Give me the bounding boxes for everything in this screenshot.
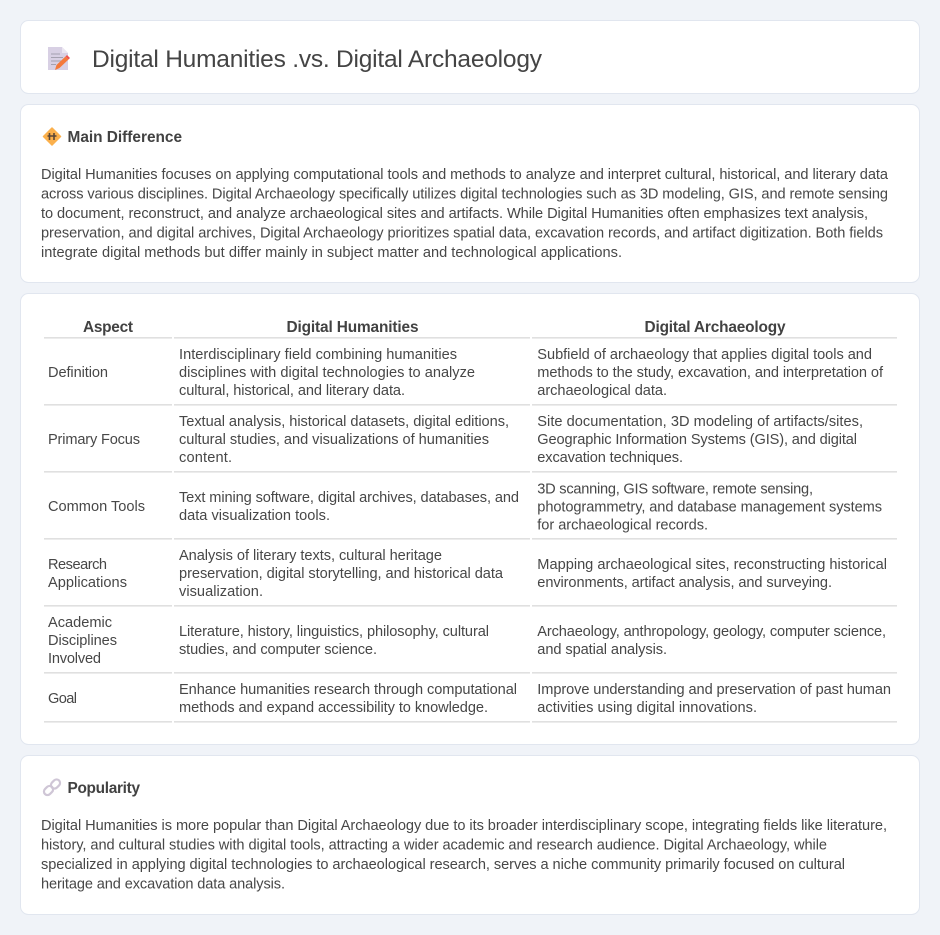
text block: popularity: history, and cultural studies with digital tools, attracting a wider academic and research audience. Digital Archaeology, while bbox=[41, 838, 827, 854]
text block: main difference: across various disciplines. Digital Archaeology specifically utilizes digital technologies such as 3D modeling, GIS, and remote sensing bbox=[41, 186, 888, 202]
text block: popularity: heritage and excavation data analysis. bbox=[41, 876, 285, 892]
row: academic disciplines involved: Literature, history, linguistics, philosophy, cultural bbox=[179, 624, 489, 640]
text block: main difference: integrate digital methods but differ mainly in subject matter and technological applications. bbox=[41, 245, 622, 261]
row: goal: Goal bbox=[48, 691, 77, 707]
icon: document with pencil bbox=[48, 47, 70, 70]
row: research applications: preservation, digital storytelling, and historical data bbox=[179, 566, 504, 582]
row: primary focus: Site documentation, 3D modeling of artifacts/sites, bbox=[537, 414, 863, 430]
row: common tools: photogrammetry, and database management systems bbox=[537, 500, 882, 516]
row: goal: activities using digital innovations. bbox=[537, 700, 757, 716]
row: definition: Subfield of archaeology that applies digital tools and bbox=[537, 347, 872, 363]
row: research applications: Analysis of literary texts, cultural heritage bbox=[179, 548, 442, 564]
heading: popularity: Popularity bbox=[68, 780, 140, 797]
text block: main difference: preservation, and digital archives, Digital Archaeology prioritizes spatial data, excavation records, and artifact digitization. Both fields bbox=[41, 226, 883, 242]
row: research applications: visualization. bbox=[179, 584, 263, 600]
row: academic disciplines involved: and spatial analysis. bbox=[537, 642, 667, 658]
text block: main difference: to document, reconstruct, and analyze archaeological sites and artifacts. While Digital Humanities often emphasizes text analysis, bbox=[41, 206, 868, 222]
row: definition: Definition bbox=[48, 365, 108, 381]
text block: popularity: Digital Humanities is more popular than Digital Archaeology due to its broader interdisciplinary scope, integrating fields like literature, bbox=[41, 818, 887, 834]
row: goal: Enhance humanities research through computational bbox=[179, 682, 517, 698]
row: research applications: environments, artifact analysis, and surveying. bbox=[537, 575, 832, 591]
panel: popularity bbox=[20, 756, 920, 914]
row: common tools: Common Tools bbox=[48, 499, 145, 515]
row: primary focus: cultural studies, and visualizations of humanities bbox=[179, 432, 489, 448]
row: research applications: Mapping archaeological sites, reconstructing historical bbox=[537, 557, 887, 573]
text block: main difference: Digital Humanities focuses on applying computational tools and methods to analyze and interpret cultural, historical, and literary data bbox=[41, 167, 889, 183]
row: academic disciplines involved: Disciplines bbox=[48, 633, 117, 649]
row: goal: methods and expand accessibility to knowledge. bbox=[179, 700, 488, 716]
row: primary focus bbox=[48, 414, 863, 466]
row: definition: methods to the study, excavation, and interpretation of bbox=[537, 365, 884, 381]
text block: popularity bbox=[41, 818, 887, 892]
row: primary focus: Textual analysis, historical datasets, digital editions, bbox=[179, 414, 509, 430]
row: primary focus: content. bbox=[179, 450, 232, 466]
row: primary focus: Geographic Information Systems (GIS), and digital bbox=[537, 432, 857, 448]
text block: main difference bbox=[41, 167, 889, 261]
row: primary focus: Primary Focus bbox=[48, 432, 140, 448]
row: common tools: 3D scanning, GIS software, remote sensing, bbox=[537, 482, 813, 498]
row: academic disciplines involved: studies, and computer science. bbox=[179, 642, 377, 658]
panel: main difference bbox=[20, 104, 920, 282]
row: definition: disciplines with digital technologies to analyze bbox=[179, 365, 475, 381]
text block: popularity: specialized in applying digital technologies to archaeological research, serves a niche community primarily focused on cultural bbox=[41, 857, 845, 873]
row: common tools: Text mining software, digital archives, databases, and bbox=[179, 490, 519, 506]
row: common tools: data visualization tools. bbox=[179, 508, 330, 524]
row: research applications: Research bbox=[48, 557, 107, 573]
row: common tools bbox=[48, 482, 882, 534]
panel: title header bbox=[20, 20, 920, 94]
row: definition: archaeological data. bbox=[537, 383, 667, 399]
row: research applications: Applications bbox=[48, 575, 127, 591]
row: academic disciplines involved: Archaeology, anthropology, geology, computer science, bbox=[537, 624, 886, 640]
panel: comparison table bbox=[20, 294, 920, 744]
row: research applications bbox=[48, 548, 887, 600]
row: academic disciplines involved bbox=[48, 615, 886, 667]
row: common tools: for archaeological records. bbox=[537, 518, 708, 534]
table header bbox=[83, 319, 786, 336]
heading: main difference: Main Difference bbox=[68, 129, 182, 146]
row: goal: Improve understanding and preservation of past human bbox=[537, 682, 891, 698]
row: definition bbox=[48, 347, 884, 399]
icon: chain link bbox=[42, 778, 62, 797]
row: definition: Interdisciplinary field combining humanities bbox=[179, 347, 457, 363]
icon: warning diamond bbox=[44, 128, 60, 145]
row: primary focus: excavation techniques. bbox=[537, 450, 683, 466]
row: academic disciplines involved: Academic bbox=[48, 615, 112, 631]
title: Digital Humanities .vs. Digital Archaeology bbox=[92, 46, 543, 73]
row: academic disciplines involved: Involved bbox=[48, 651, 101, 667]
table header: Digital Archaeology bbox=[644, 319, 786, 336]
table header: Digital Humanities bbox=[286, 319, 418, 336]
row: goal bbox=[48, 682, 891, 716]
table header: Aspect bbox=[83, 319, 133, 336]
row: definition: cultural, historical, and literary data. bbox=[179, 383, 405, 399]
